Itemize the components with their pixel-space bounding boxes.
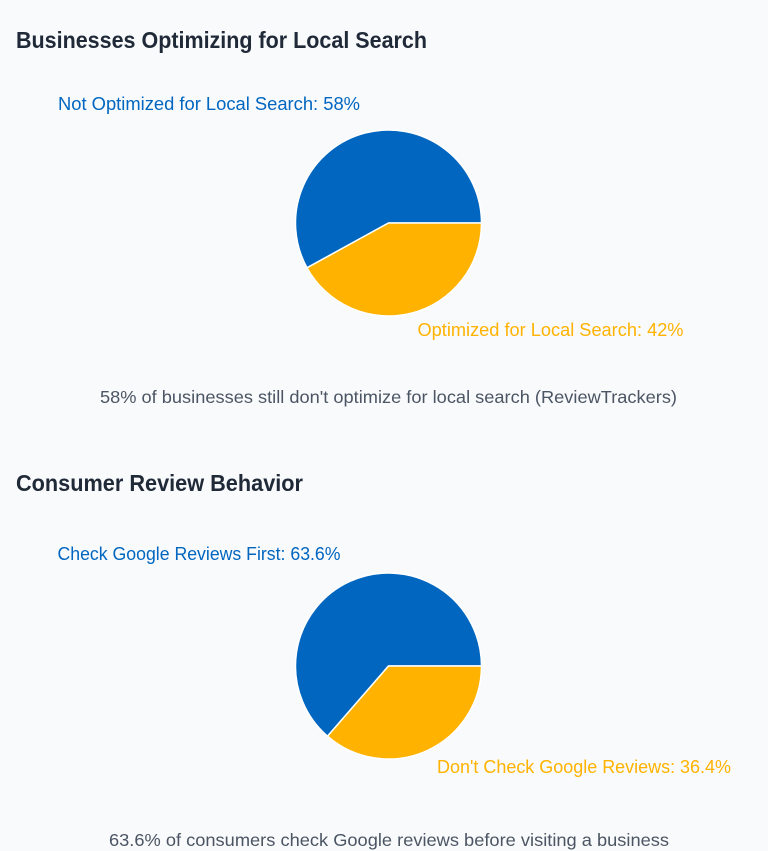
pie chart: review behavior bbox=[296, 573, 482, 759]
slice: not optimized 58% bbox=[296, 130, 482, 268]
label: optimized 42%: Optimized for Local Search: 42% bbox=[418, 320, 684, 340]
label: check google reviews first 63.6%: Check Google Reviews First: 63.6% bbox=[58, 544, 340, 564]
pie chart: local search optimization bbox=[296, 130, 482, 316]
panel: businesses optimizing for local search bbox=[16, 27, 684, 407]
label: not optimized 58%: Not Optimized for Local Search: 58% bbox=[58, 94, 360, 114]
slice: don't check 36.4% bbox=[328, 666, 482, 759]
panel: consumer review behavior bbox=[16, 470, 731, 850]
slice: optimized 42% bbox=[307, 223, 482, 316]
heading: consumer review behavior: Consumer Review Behavior bbox=[16, 470, 303, 496]
caption: local search source: 58% of businesses still don't optimize for local search (ReviewTrackers) bbox=[100, 387, 677, 407]
label: don't check google reviews 36.4%: Don't Check Google Reviews: 36.4% bbox=[437, 757, 731, 777]
slice: check reviews 63.6% bbox=[296, 573, 482, 736]
heading: businesses optimizing: Businesses Optimizing for Local Search bbox=[16, 27, 427, 53]
caption: consumer review statistic: 63.6% of consumers check Google reviews before visiting a business bbox=[109, 830, 669, 850]
